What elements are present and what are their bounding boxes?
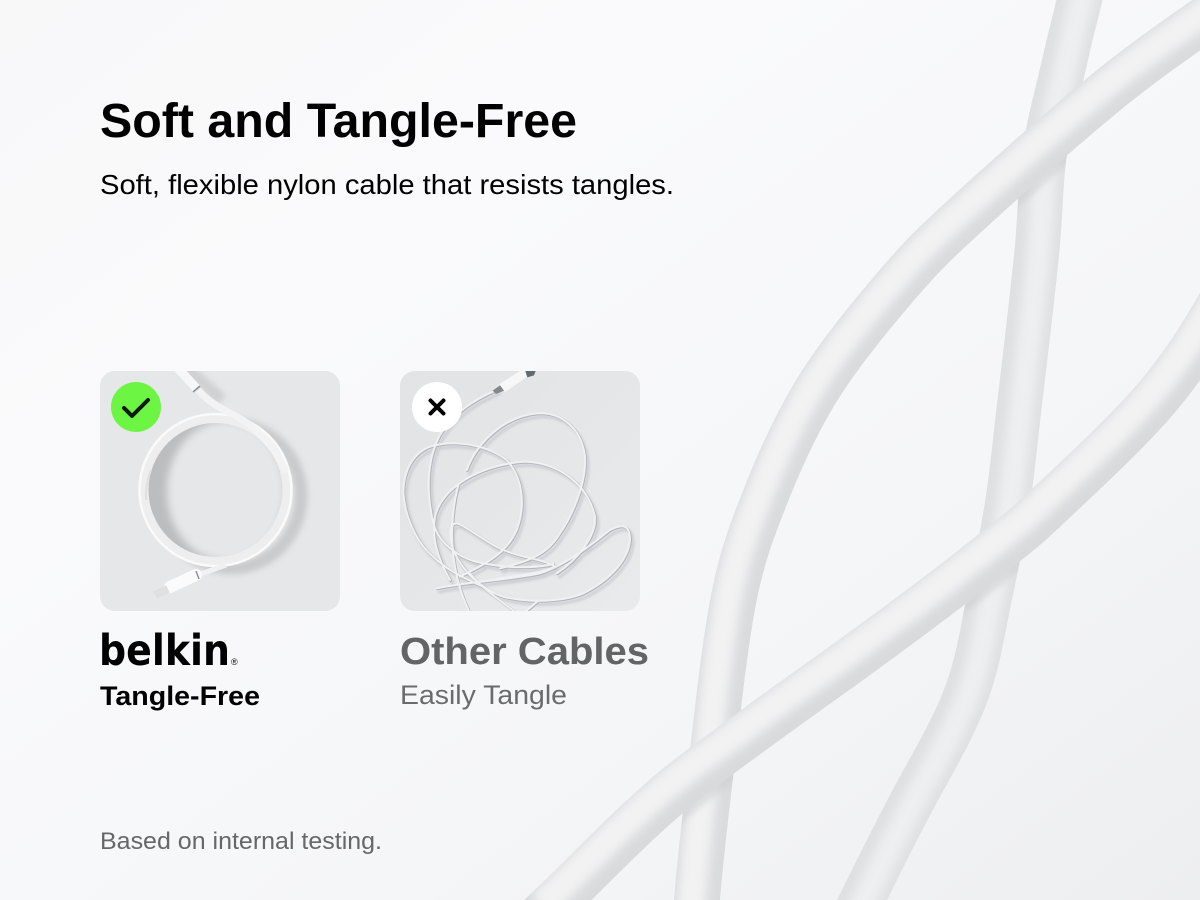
top cable lead [196, 388, 248, 420]
tangle outline [404, 391, 631, 614]
cable: upper strand [674, 0, 1200, 900]
tangle shadow [406, 394, 633, 604]
logo: belkin: belkin [99, 626, 230, 676]
cable photo background [551, 0, 1200, 900]
lead shadow [186, 368, 222, 400]
coiled cable [140, 414, 292, 566]
logo: belkin: ® [231, 657, 238, 667]
title: Soft and Tangle-Free [100, 95, 577, 148]
label: Other Cables: Other Cables [400, 631, 649, 673]
coil shadow [161, 424, 301, 568]
bottom connector [164, 564, 227, 593]
cable: lower strand [551, 299, 1200, 900]
icon: white x badge [412, 382, 462, 432]
label: Easily Tangle: Easily Tangle [400, 680, 567, 710]
tangle strands [403, 390, 630, 613]
panel: Belkin coiled cable [100, 366, 340, 611]
panel: other tangled cables [400, 370, 640, 614]
cable: rear strand [837, 0, 1102, 900]
cable connector [493, 370, 536, 394]
footnote: Based on internal testing. [100, 828, 382, 855]
tangled cable [403, 370, 633, 614]
icon: green check badge [111, 382, 161, 432]
subtitle: Soft, flexible nylon cable that resists tangles. [100, 169, 674, 200]
label: Tangle-Free: Tangle-Free [100, 681, 260, 711]
